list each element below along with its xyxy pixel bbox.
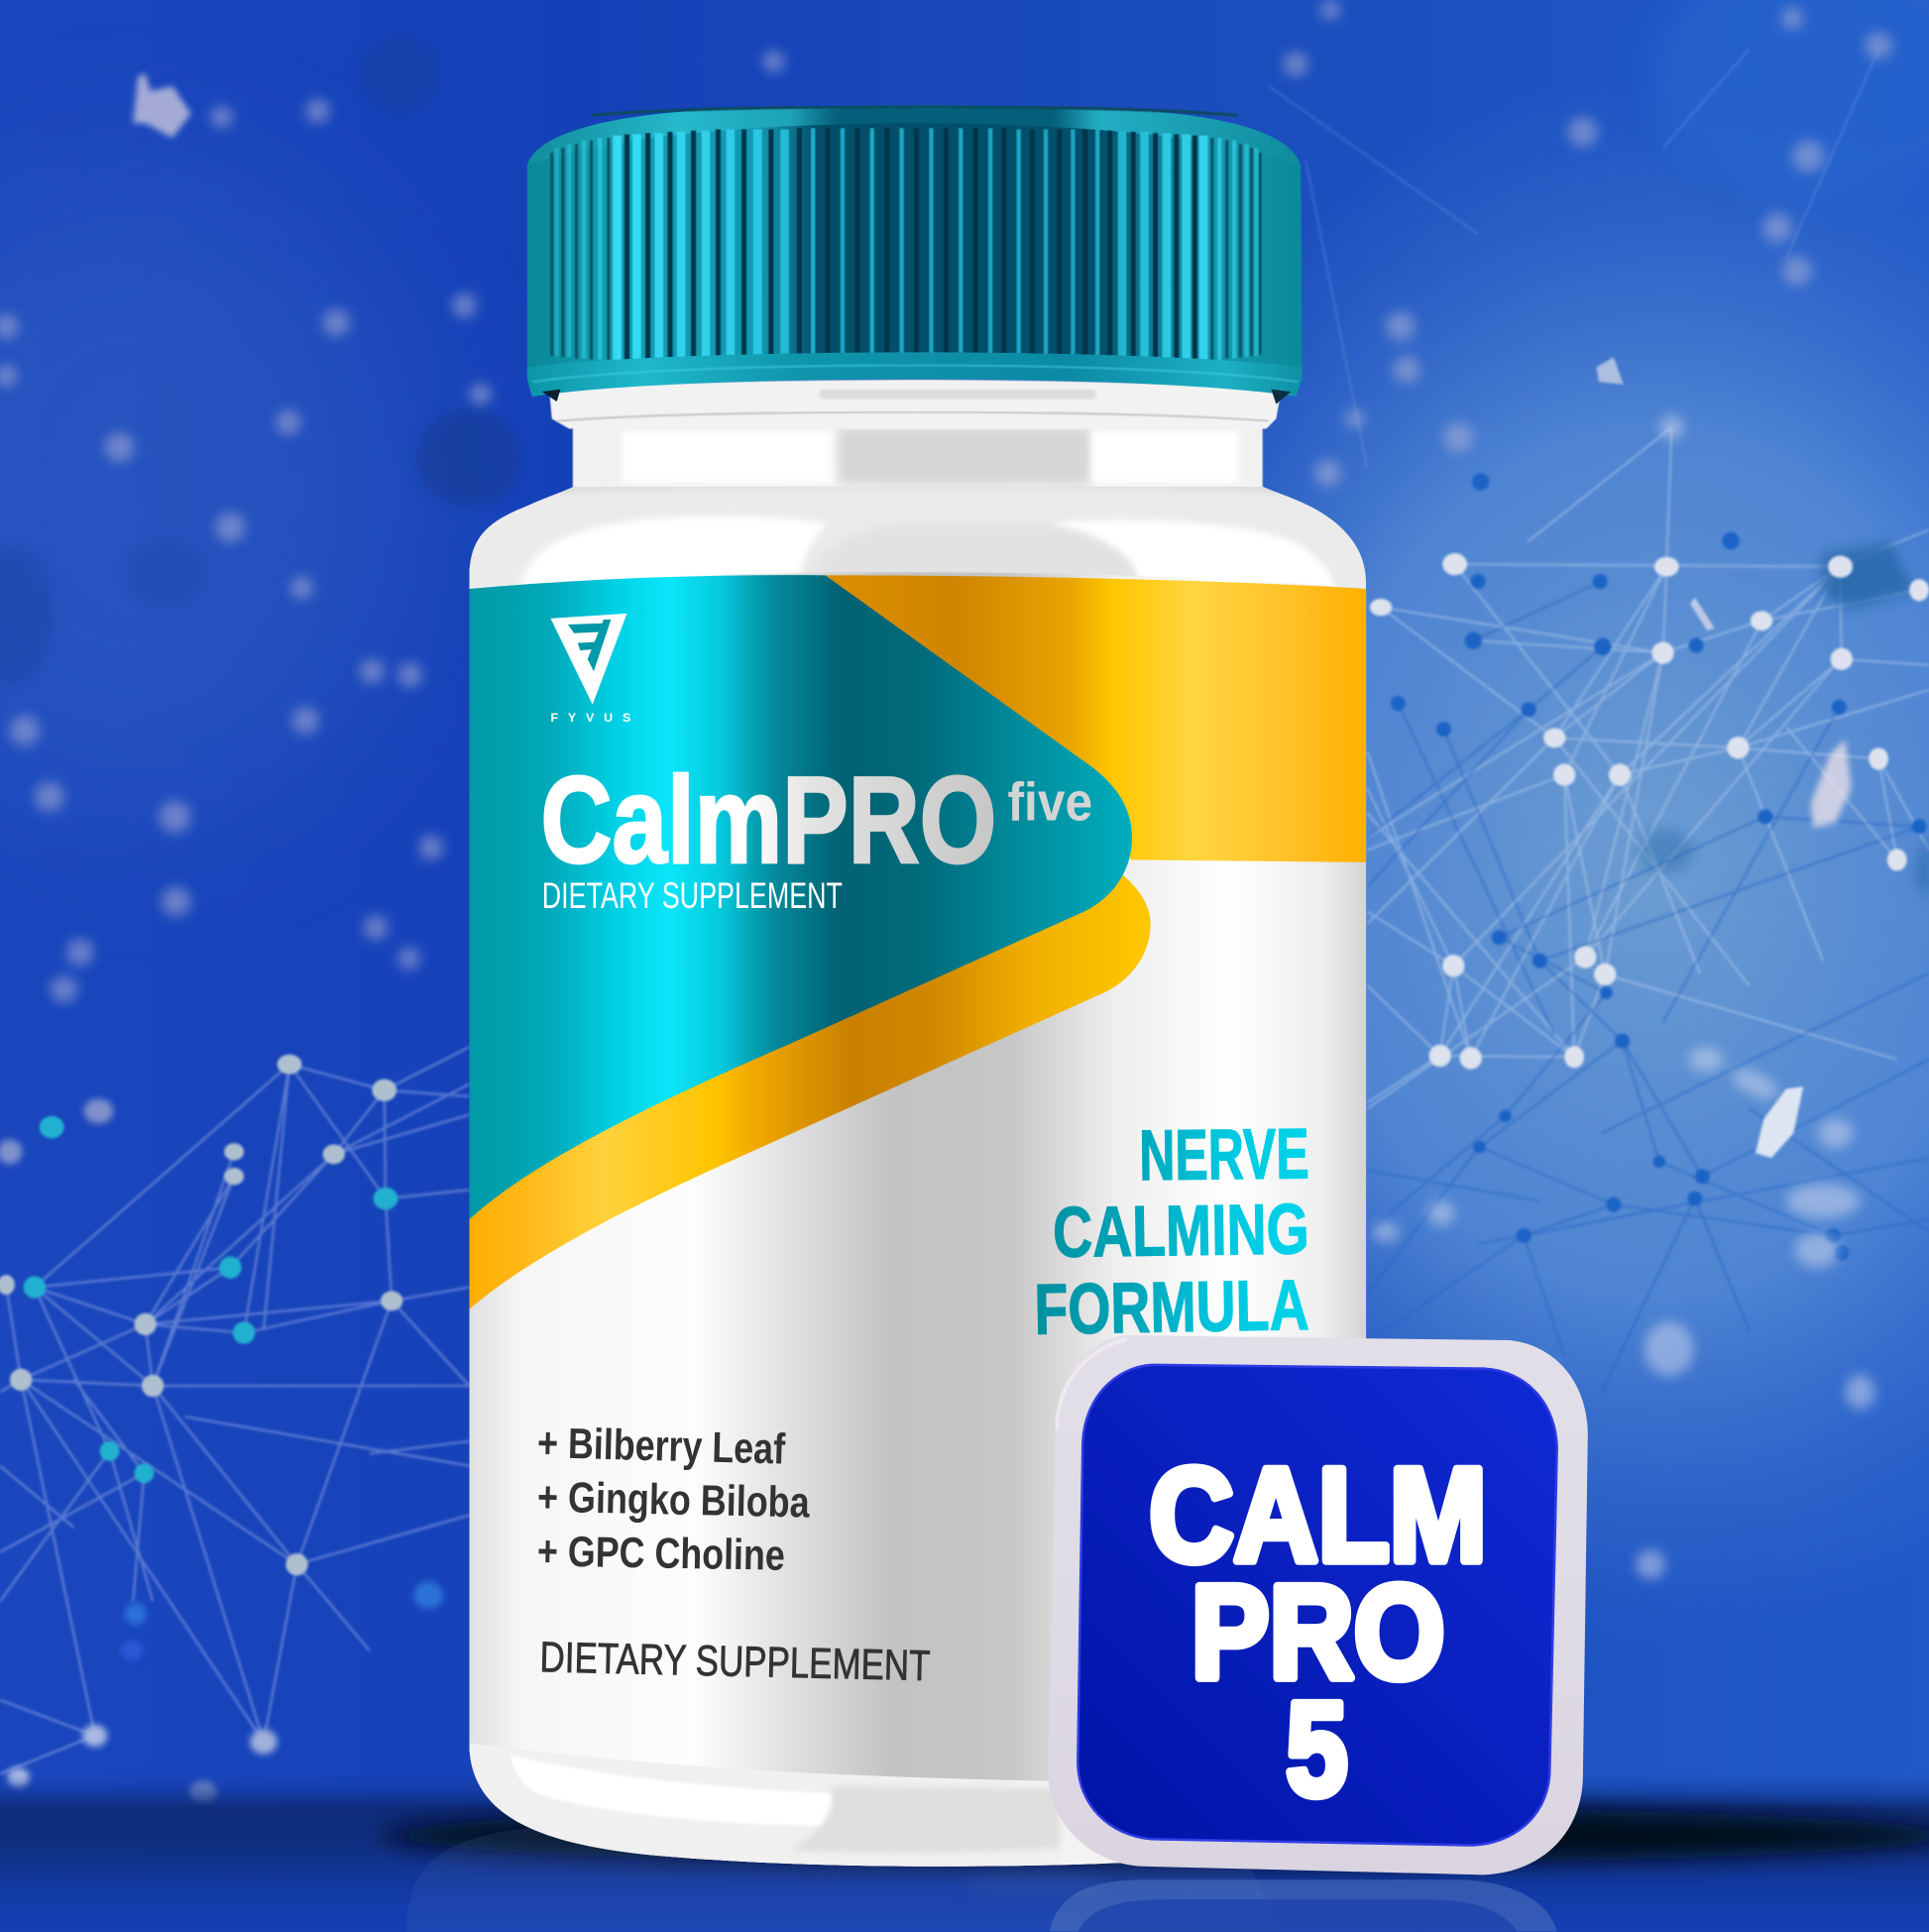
floor: dark band and reflective surface xyxy=(0,1773,1929,1932)
ingredients list xyxy=(537,1420,811,1580)
network: left cluster xyxy=(0,1047,469,1773)
cap rim xyxy=(527,352,1302,397)
network: right dark patch xyxy=(1639,542,1929,899)
tagline: nerve calming formula: NERVE xyxy=(1139,1114,1309,1195)
badge: calm pro 5 xyxy=(1049,1335,1588,1875)
tagline: nerve calming formula xyxy=(1034,1114,1309,1350)
rib grooves: center xyxy=(828,128,1085,364)
badge text: CALM xyxy=(1149,1441,1487,1589)
logo: FYVUS: FYVUS xyxy=(550,711,630,725)
badge frame xyxy=(1049,1335,1588,1875)
rib highlights: far xyxy=(557,138,1257,360)
bottle body xyxy=(469,482,1366,1873)
brand name: CalmPRO: CalmPRO xyxy=(541,752,996,889)
badge blue face xyxy=(1078,1365,1557,1846)
tagline: nerve calming formula: FORMULA xyxy=(1034,1266,1309,1350)
ingredients list: + Bilberry Leaf xyxy=(537,1420,786,1473)
rib highlights: center xyxy=(813,128,1097,364)
background: blurred bokeh dots upper area xyxy=(0,0,1892,1003)
network: right nodes xyxy=(1370,357,1929,1579)
logo: FYVUS xyxy=(550,614,630,725)
network: left nodes xyxy=(0,1055,443,1803)
bottle cap xyxy=(527,105,1302,404)
brand suffix: five: five xyxy=(1007,772,1092,833)
lower body xyxy=(470,1743,1120,1867)
badge text: 5 xyxy=(1286,1676,1347,1824)
background: shard top left xyxy=(133,74,191,138)
shoulder highlights xyxy=(470,487,1366,589)
rib grooves: far xyxy=(552,138,1260,360)
label: teal panel xyxy=(469,575,1132,1219)
label: white base xyxy=(469,572,1366,1782)
rib highlights: mid xyxy=(618,129,1203,364)
badge text: PRO xyxy=(1191,1559,1445,1707)
label: yellow top band xyxy=(826,575,1366,862)
ingredients list: + GPC Choline xyxy=(537,1528,785,1580)
footer text: dietary supplement: DIETARY SUPPLEMENT xyxy=(539,1634,931,1690)
subtitle: dietary supplement: DIETARY SUPPLEMENT xyxy=(542,874,843,916)
tagline: nerve calming formula: CALMING xyxy=(1053,1190,1309,1273)
bottle neck and lip xyxy=(549,380,1281,496)
badge text xyxy=(1149,1441,1487,1824)
bottle xyxy=(469,105,1366,1873)
ingredients list: + Gingko Biloba xyxy=(537,1474,811,1528)
cap ribs xyxy=(552,128,1260,364)
label: yellow swoosh xyxy=(469,868,1151,1309)
network: right cluster lines xyxy=(1269,50,1929,1392)
rib grooves: mid xyxy=(627,128,1194,364)
